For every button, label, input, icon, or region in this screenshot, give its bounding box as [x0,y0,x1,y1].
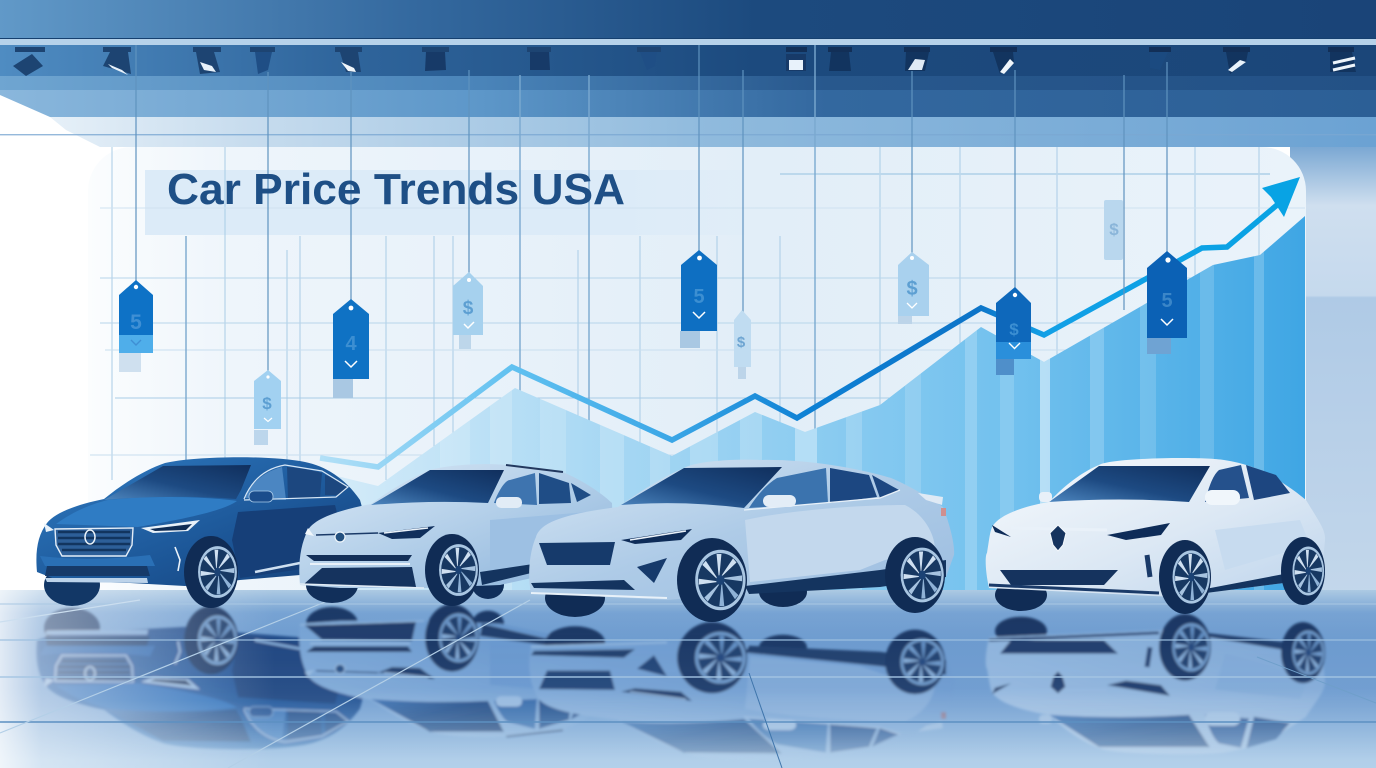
light rail [0,39,1376,45]
ceiling [0,0,1376,147]
price tag 7 [898,252,929,324]
price tag 9 [1147,251,1187,354]
spotlight 8 [637,47,661,70]
price tag 3 [333,299,369,398]
arrowhead [1262,177,1300,217]
chart panel [88,147,1306,607]
spotlight 15 [1328,47,1356,72]
floor tile lines [0,600,1376,768]
car 3: silver coupe crossover [529,460,954,622]
car 1: dark blue SUV [36,457,366,608]
banner band behind title [145,170,745,235]
hanging cables [136,45,1167,372]
spotlight 9 [786,47,807,71]
showroom floor [0,590,1376,768]
spotlights [13,47,1356,76]
spotlight 14 [1223,47,1250,74]
car 4: white hatchback [986,458,1325,614]
rising price trend line with arrow [320,177,1300,467]
price tag 7: $ [906,278,918,300]
price tag 9: 5 [1161,290,1173,312]
price tag 1 [119,280,153,372]
car reflections [36,604,1325,760]
price tag 5: 5 [693,286,705,308]
spotlight 4 [250,47,275,74]
price tag 6 [734,310,751,379]
price tag 8 [996,287,1031,375]
background grid [90,45,1305,480]
spotlight 7 [527,47,551,70]
price tag 2: $ [262,394,272,413]
title: Car Price Trends USA [167,165,625,214]
right wall [1290,147,1376,597]
spotlight 2 [103,47,131,75]
spotlight 11 [904,47,930,71]
spotlight 1 [13,47,45,76]
area chart bars [320,200,1305,600]
price tag 2 [254,370,281,445]
spotlight 12 [990,47,1017,74]
ghost price tag: $ [1109,220,1119,239]
price tag 4 [453,272,483,349]
spotlight 6 [422,47,449,71]
spotlight 5 [335,47,362,72]
blue floor tint [0,590,1376,768]
spotlight 3 [193,47,221,74]
price tag 1: 5 [130,311,142,334]
ghost price tag [1104,200,1123,260]
price tag 8: $ [1009,320,1019,339]
price tag 6: $ [737,334,746,351]
price tag 4: $ [463,298,474,319]
car 2: light blue crossover [299,464,614,606]
spotlight 10 [828,47,852,71]
spotlight 13 [1149,47,1171,70]
price tag 3: 4 [345,333,357,355]
price tag 5 [680,250,717,348]
